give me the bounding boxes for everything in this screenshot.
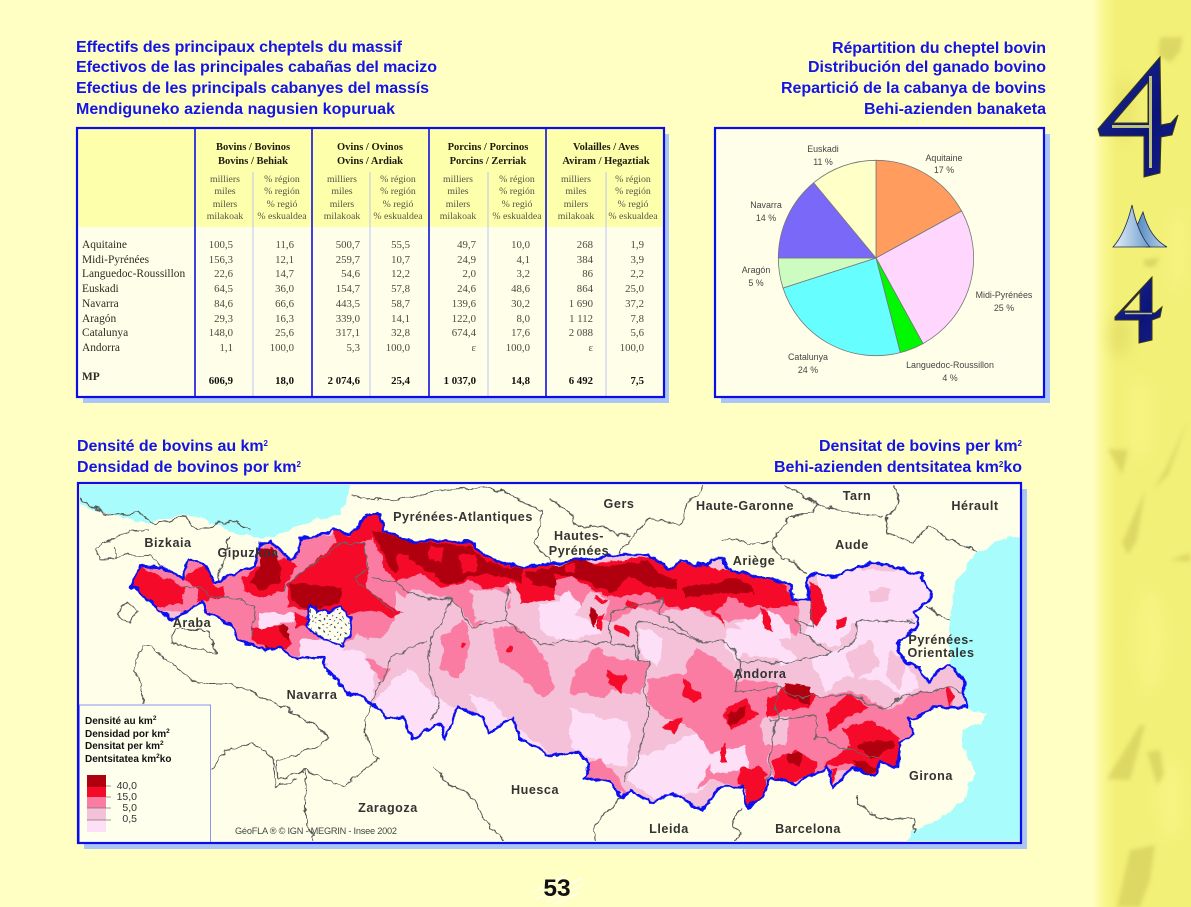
table values: 339,0 <box>336 313 360 325</box>
map place names: Lleida <box>649 822 689 836</box>
map legend: 2 <box>166 728 170 735</box>
table values: 2,2 <box>630 268 644 280</box>
table values: 64,5 <box>214 283 233 295</box>
table column headers: % eskualdea <box>608 211 658 222</box>
table values: 12,1 <box>275 254 294 266</box>
heading: livestock totals <box>76 39 437 118</box>
table column headers: milakoak <box>440 211 476 222</box>
table column headers: Bovins / Behiak <box>218 156 288 167</box>
table column headers: Porcins / Zerriak <box>450 156 527 167</box>
pie labels: 5 % <box>748 278 764 288</box>
map legend: 0,5 <box>122 813 137 825</box>
table values: 14,7 <box>275 268 295 280</box>
table row labels: Navarra <box>82 298 119 310</box>
table column headers: Ovins / Ardiak <box>337 156 403 167</box>
table column headers: % regió <box>267 199 297 210</box>
map place names: Pyrénées-Atlantiques <box>393 510 533 524</box>
map legend: 2 <box>160 740 164 747</box>
pie labels: 14 % <box>756 213 776 223</box>
table values: 156,3 <box>209 254 233 266</box>
map legend: 2 <box>156 753 160 760</box>
heading: cattle distribution <box>781 40 1046 118</box>
table column headers: Porcins / Porcinos <box>448 142 528 153</box>
map place names: Bizkaia <box>144 536 192 550</box>
table values: 1 037,0 <box>444 375 476 387</box>
table values: 29,3 <box>214 313 233 325</box>
table values: 86 <box>582 268 594 280</box>
heading: livestock totals: Effectifs des principaux cheptels du massif <box>76 39 403 56</box>
table values: 500,7 <box>336 239 361 251</box>
table column headers: % région <box>380 174 416 185</box>
table values: 16,3 <box>275 313 294 325</box>
table values: 2 088 <box>569 327 593 339</box>
icon: twin mountain peaks <box>1113 205 1167 247</box>
page number <box>532 874 584 904</box>
table values: 7,5 <box>630 375 644 387</box>
table values: 37,2 <box>625 298 644 310</box>
table values: 864 <box>577 283 594 295</box>
map legend: 40,0 <box>117 780 137 792</box>
map place names: Zaragoza <box>358 801 418 815</box>
table values: 58,7 <box>391 298 411 310</box>
table column headers: milliers <box>327 174 357 185</box>
table values: 5,3 <box>346 342 360 354</box>
pie labels: Euskadi <box>807 144 839 154</box>
icon: large chapter number 4 <box>1098 57 1178 177</box>
table values: 25,6 <box>275 327 295 339</box>
icon: small chapter number 4 <box>1115 277 1162 343</box>
map place names: Gers <box>604 497 634 511</box>
table column headers: Bovins / Bovinos <box>216 142 290 153</box>
table values: 48,6 <box>511 283 531 295</box>
pie labels: Catalunya <box>788 352 828 362</box>
map legend: Densidad por km <box>85 729 166 740</box>
map place names: Hérault <box>951 499 999 513</box>
map place names: Orientales <box>907 646 975 660</box>
table column headers: milakoak <box>558 211 594 222</box>
heading: cattle distribution: Distribución del ganado bovino <box>808 59 1046 76</box>
pie labels <box>742 144 1033 383</box>
table values: 100,0 <box>386 342 410 354</box>
pie labels: Aragón <box>742 265 770 275</box>
table column headers: milakoak <box>207 211 243 222</box>
table column headers: % regió <box>383 199 413 210</box>
table column headers: milers <box>446 199 470 210</box>
map legend: 15,0 <box>117 791 137 803</box>
heading: livestock totals: Efectius de les principals cabanyes del massís <box>76 80 429 97</box>
map legend: Dentsitatea km <box>85 754 156 765</box>
table column headers: % région <box>499 174 535 185</box>
table column headers: Aviram / Hegaztiak <box>562 156 650 167</box>
table values: 154,7 <box>336 283 361 295</box>
table values: 12,2 <box>391 268 410 280</box>
table row labels: Catalunya <box>82 327 128 339</box>
table values: 24,6 <box>457 283 477 295</box>
table column headers: milliers <box>443 174 473 185</box>
sea: Bay of Biscay <box>80 485 350 540</box>
table values: 139,6 <box>452 298 477 310</box>
map place names: Aude <box>835 538 869 552</box>
heading: density left: 2 <box>297 460 302 469</box>
table column headers: milers <box>213 199 237 210</box>
pie slices <box>778 160 974 356</box>
heading: cattle distribution: Behi-azienden banaketa <box>864 101 1046 118</box>
table values: 14,1 <box>391 313 410 325</box>
table row labels <box>82 239 185 383</box>
table values: 11,6 <box>276 239 295 251</box>
map place names: Pyrénées <box>549 544 609 558</box>
table values: 259,7 <box>336 254 361 266</box>
map place names: Pyrénées- <box>908 633 974 647</box>
table values: 22,6 <box>214 268 234 280</box>
table values: 4,1 <box>516 254 530 266</box>
table column headers: milliers <box>210 174 240 185</box>
map legend <box>80 705 210 843</box>
table values: 1 112 <box>569 313 593 325</box>
table values: 606,9 <box>209 375 234 387</box>
heading: density right: ko <box>1003 459 1022 476</box>
map place names: Navarra <box>287 688 338 702</box>
internal borders <box>182 543 967 780</box>
table values: 1,1 <box>220 342 233 354</box>
table column headers: % région <box>264 174 300 185</box>
table values: 55,5 <box>391 239 410 251</box>
table values: 5,6 <box>630 327 645 339</box>
table row labels: Aragón <box>82 313 116 325</box>
table values: 24,9 <box>457 254 476 266</box>
heading: livestock totals: Mendiguneko azienda nagusien kopuruak <box>76 101 395 118</box>
table row labels: MP <box>82 371 100 383</box>
dotted excluded enclave <box>308 607 352 645</box>
table values: 36,0 <box>275 283 294 295</box>
panel: cattle pie chart <box>715 128 1050 403</box>
table values: 3,2 <box>516 268 530 280</box>
pie labels: Languedoc-Roussillon <box>906 360 994 370</box>
pie labels: 17 % <box>934 165 954 175</box>
table column headers: % región <box>499 186 535 197</box>
table values: 2,0 <box>462 268 476 280</box>
table values: 18,0 <box>275 375 294 387</box>
map legend: 2 <box>153 715 157 722</box>
sea: Mediterranean <box>897 535 1035 855</box>
table values: 10,0 <box>511 239 530 251</box>
heading: density right: Densitat de bovins per km <box>819 438 1018 455</box>
table column headers: % región <box>264 186 300 197</box>
table values: 10,7 <box>391 254 411 266</box>
pie labels: 25 % <box>994 303 1014 313</box>
heading: density right: Behi-azienden dentsitatea km <box>774 459 999 476</box>
heading: cattle distribution: Repartició de la cabanya de bovins <box>781 80 1046 97</box>
external borders <box>80 485 977 845</box>
map place names: Barcelona <box>775 822 841 836</box>
table values: 317,1 <box>336 327 360 339</box>
table values: 122,0 <box>452 313 476 325</box>
table values: 100,0 <box>620 342 644 354</box>
pie labels: Aquitaine <box>925 153 963 163</box>
heading: density left: 2 <box>264 439 269 448</box>
table values: 14,8 <box>511 375 531 387</box>
pie labels: 11 % <box>813 157 833 167</box>
table column headers: milakoak <box>324 211 360 222</box>
map credit: GéoFLA ® © IGN - MEGRIN - Insee 2002 <box>235 826 397 836</box>
table values: 66,6 <box>275 298 295 310</box>
map place names: Andorra <box>734 667 787 681</box>
massif blue outline <box>132 513 967 810</box>
table values: 8,0 <box>516 313 530 325</box>
table values: 84,6 <box>214 298 234 310</box>
table values: 30,2 <box>511 298 530 310</box>
map drawing <box>70 475 1035 855</box>
table column headers: milers <box>564 199 588 210</box>
map place names: Hautes- <box>554 529 604 543</box>
table values: 384 <box>577 254 594 266</box>
table column headers: miles <box>565 186 587 197</box>
pie labels: Navarra <box>750 200 782 210</box>
panel: density map <box>70 475 1035 855</box>
table values: 100,0 <box>270 342 294 354</box>
table values: 100,5 <box>209 239 233 251</box>
table row labels: Andorra <box>82 342 120 354</box>
table column headers: % eskualdea <box>257 211 307 222</box>
table values <box>209 239 645 387</box>
table column headers: miles <box>331 186 353 197</box>
decorative yellow side band <box>1092 0 1191 907</box>
table values: 100,0 <box>506 342 530 354</box>
table values: ε <box>588 342 593 354</box>
table column headers: miles <box>214 186 236 197</box>
table values: 25,4 <box>391 375 411 387</box>
table row labels: Aquitaine <box>82 239 127 251</box>
table values: 6 492 <box>569 375 593 387</box>
heading: density left: Densidad de bovinos por km <box>77 459 297 476</box>
table column headers: milers <box>330 199 354 210</box>
heading: cattle distribution: Répartition du cheptel bovin <box>832 40 1046 57</box>
table values: 3,9 <box>630 254 644 266</box>
table column headers: % eskualdea <box>373 211 423 222</box>
table values: 32,8 <box>391 327 410 339</box>
table column headers: Volailles / Aves <box>573 142 639 153</box>
heading: density right <box>774 438 1023 476</box>
table values: 54,6 <box>341 268 361 280</box>
table column headers: % regió <box>502 199 532 210</box>
table values: 268 <box>577 239 593 251</box>
map place names: Girona <box>909 769 953 783</box>
table column headers: % región <box>380 186 416 197</box>
table column headers: % eskualdea <box>492 211 542 222</box>
table values: 2 074,6 <box>328 375 361 387</box>
heading: density right: 2 <box>1018 439 1023 448</box>
panel: livestock table <box>77 128 669 403</box>
pie labels: Midi-Pyrénées <box>976 290 1033 300</box>
table values: 7,8 <box>630 313 644 325</box>
table values: 1,9 <box>630 239 644 251</box>
map legend: Densité au km <box>85 716 153 727</box>
table values: 148,0 <box>209 327 233 339</box>
map legend: 5,0 <box>122 802 137 814</box>
table values: 1 690 <box>569 298 593 310</box>
table row labels: Euskadi <box>82 283 119 295</box>
map place names: Ariège <box>733 554 775 568</box>
heading: density right: 2 <box>999 460 1004 469</box>
table values: 17,6 <box>511 327 531 339</box>
table column headers: % región <box>615 186 651 197</box>
table column headers: miles <box>447 186 469 197</box>
heading: livestock totals: Efectivos de las principales cabañas del macizo <box>76 59 437 76</box>
map legend: Densitat per km <box>85 741 160 752</box>
table column headers: milliers <box>561 174 591 185</box>
table row labels: Midi-Pyrénées <box>82 254 150 266</box>
table column headers: Ovins / Ovinos <box>337 142 403 153</box>
map place names: Haute-Garonne <box>696 499 794 513</box>
heading: density left: Densité de bovins au km <box>77 438 264 455</box>
table row labels: Languedoc-Roussillon <box>82 268 185 280</box>
table values: 49,7 <box>457 239 477 251</box>
table values: 57,8 <box>391 283 410 295</box>
pie labels: 4 % <box>942 373 958 383</box>
map legend: ko <box>160 754 171 765</box>
heading: density left <box>77 438 302 476</box>
map place names: Huesca <box>511 783 559 797</box>
massif density zones <box>133 514 966 808</box>
table column headers: % regió <box>618 199 648 210</box>
map place names: Araba <box>173 616 212 630</box>
map place names: Gipuzkoa <box>217 546 279 560</box>
table column headers: % région <box>615 174 651 185</box>
table values: ε <box>471 342 476 354</box>
page number: 53 <box>543 875 571 902</box>
map place names: Tarn <box>843 489 871 503</box>
pie labels: 24 % <box>798 365 818 375</box>
table column headers <box>207 142 658 222</box>
table values: 443,5 <box>336 298 360 310</box>
table values: 674,4 <box>452 327 477 339</box>
table values: 25,0 <box>625 283 644 295</box>
map place names <box>144 489 999 836</box>
